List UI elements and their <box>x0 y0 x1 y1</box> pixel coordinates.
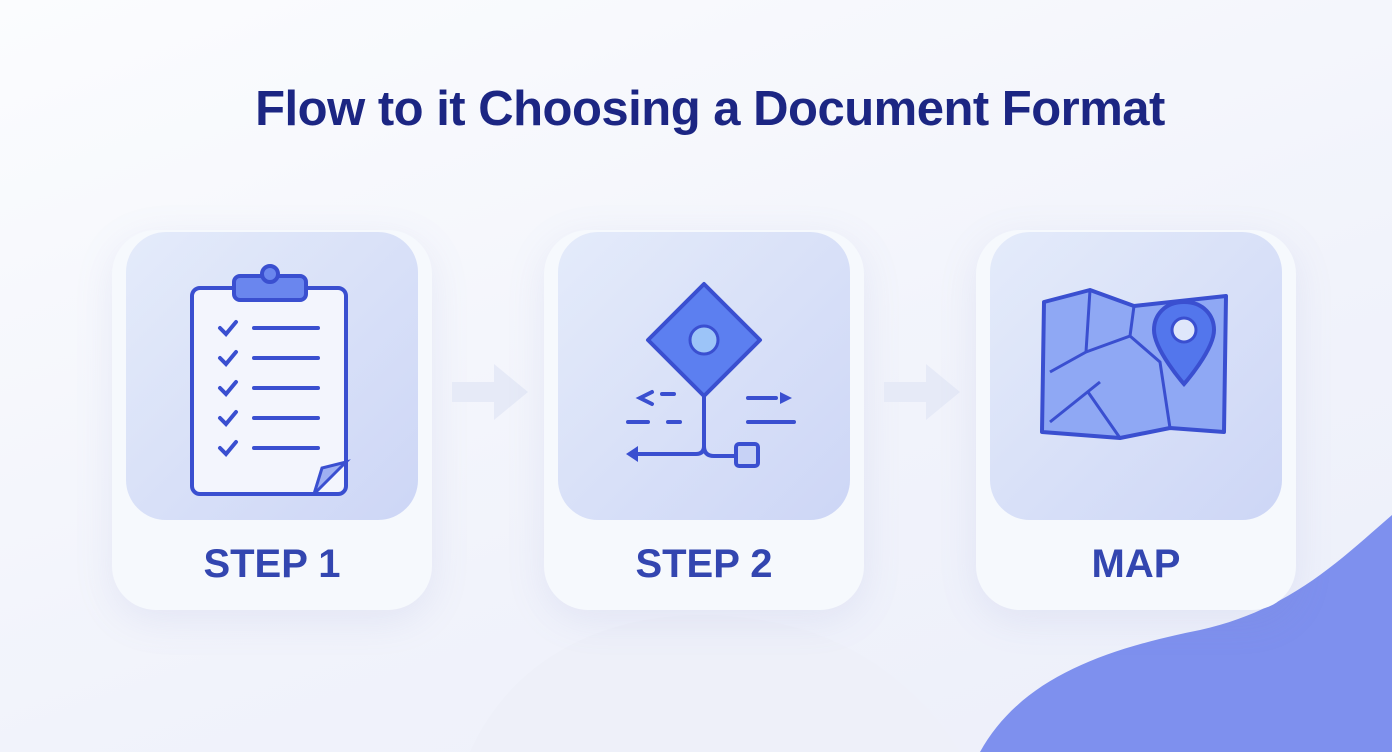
title: Flow to it Choosing a Document Format <box>255 82 1165 136</box>
arrow 2 <box>884 364 960 420</box>
panel: map <box>976 230 1296 610</box>
panel: step 2 <box>544 230 864 610</box>
label: map: MAP <box>1092 542 1180 586</box>
icon: clipboard <box>190 264 351 496</box>
label: step 2: STEP 2 <box>635 542 773 586</box>
icon: map with pin <box>1040 288 1228 440</box>
arrow 1 <box>452 364 528 420</box>
label: step 1: STEP 1 <box>203 542 341 586</box>
icon: decision diamond <box>626 282 796 468</box>
panel: step 1 <box>112 230 432 610</box>
